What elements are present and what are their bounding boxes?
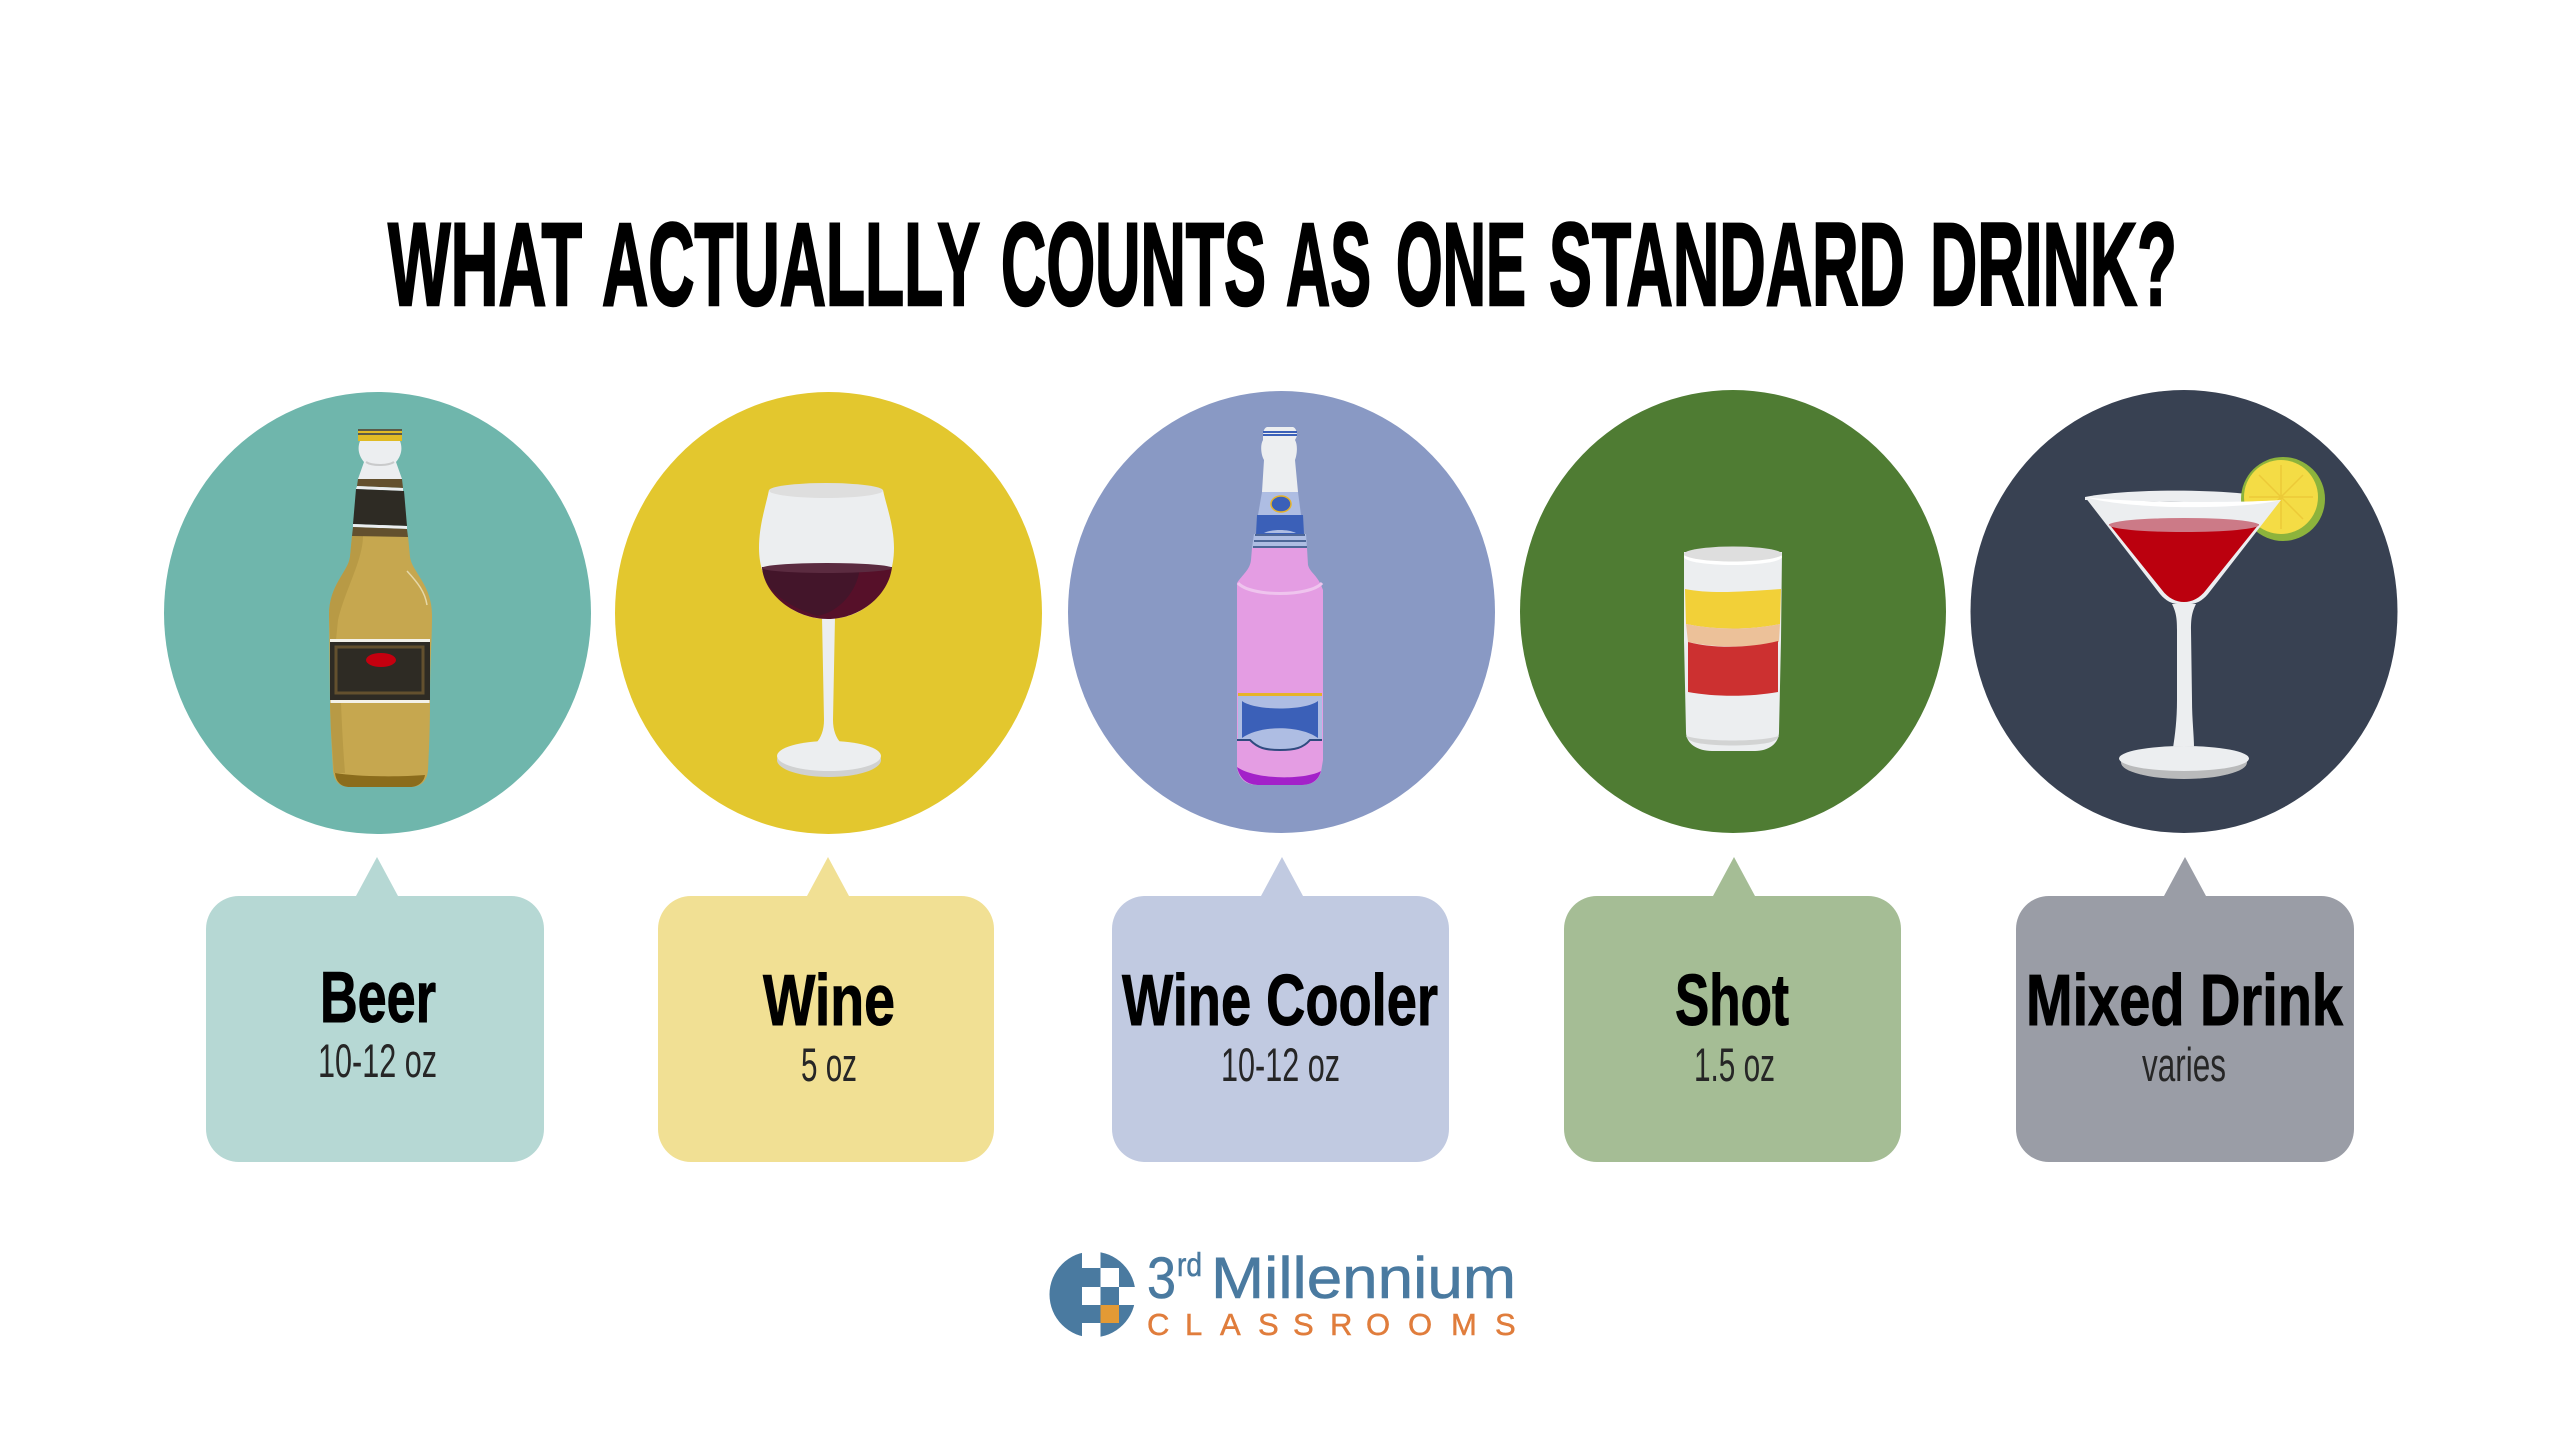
logo tagline: CLASSROOMS [1147,1307,1516,1342]
label: mixed drink name: Mixed Drink [2026,961,2344,1041]
logo wordmark: 3 [1147,1246,1176,1311]
panel: mixed drink [1970,390,2398,1162]
icon: checkered globe [1050,1250,1139,1339]
label: wine serving: 5 oz [801,1038,857,1091]
circle: wine cooler background [1068,391,1495,833]
icon: wine cooler bottle [1237,427,1323,785]
label: wine name: Wine [763,961,895,1041]
logo: 3rd Millennium Classrooms [1050,1246,1516,1342]
label: shot name: Shot [1675,961,1789,1041]
panel: wine [615,392,1042,1162]
label: mixed drink serving: varies [2142,1038,2226,1091]
title: STANDARD [1549,199,1905,331]
label: shot serving: 1.5 oz [1694,1038,1775,1091]
logo wordmark: rd [1177,1246,1202,1283]
title [388,199,2177,331]
panel: shot [1520,390,1946,1162]
circle: wine background [615,392,1042,834]
title: WHAT [388,199,582,331]
circle: mixed drink background [1970,390,2398,833]
icon: wine glass [759,483,894,777]
circle: shot background [1520,390,1946,833]
title: AS [1286,199,1371,331]
circle: beer background [164,392,591,834]
callout: wine cooler [1112,857,1449,1162]
title: COUNTS [1001,199,1266,331]
label: wine cooler serving: 10-12 oz [1221,1038,1340,1091]
callout: wine [658,857,994,1162]
title: ONE [1396,199,1526,331]
callout: shot [1564,857,1901,1162]
callout: mixed drink [2016,857,2354,1162]
title: DRINK? [1930,199,2177,331]
icon: martini glass with lime [2085,457,2325,779]
panel: wine cooler [1068,391,1495,1162]
logo wordmark: Millennium [1211,1246,1516,1311]
icon: layered shot glass [1684,546,1782,751]
label: beer name: Beer [320,958,436,1038]
icon: beer bottle [329,429,432,787]
title: ACTUALLLY [602,199,980,331]
panel: beer [164,392,591,1162]
label: wine cooler name: Wine Cooler [1122,961,1438,1041]
callout: beer [206,857,544,1162]
label: beer serving: 10-12 oz [318,1034,437,1087]
